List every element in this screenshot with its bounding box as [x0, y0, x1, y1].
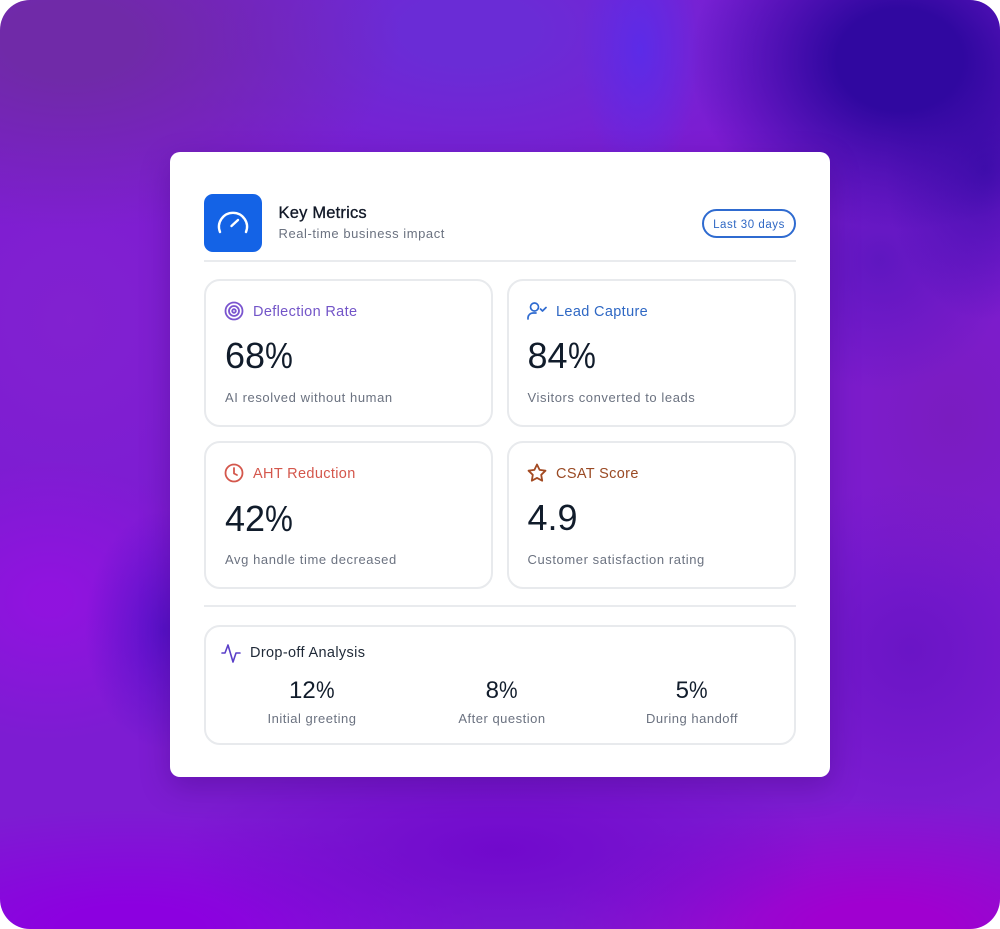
value: 4.9 — [528, 497, 578, 538]
stat: initial greeting: % — [316, 677, 334, 704]
heading: Key Metrics — [278, 204, 367, 222]
value: 84 — [528, 335, 568, 376]
value: 68 — [225, 335, 265, 376]
panel: csat score — [507, 441, 796, 589]
description: Visitors converted to leads — [528, 390, 695, 405]
value — [225, 335, 293, 376]
stat: during handoff: % — [689, 677, 708, 704]
stat: during handoff: 5 — [676, 677, 689, 704]
icon: target — [224, 302, 244, 320]
description: AI resolved without human — [225, 390, 393, 405]
badge: last 30 days: Last 30 days — [713, 219, 785, 231]
description: Avg handle time decreased — [225, 552, 397, 567]
value: % — [568, 335, 595, 376]
panel: aht reduction — [204, 441, 493, 589]
label: CSAT Score — [556, 466, 639, 482]
value — [528, 335, 595, 376]
panel: lead capture — [507, 279, 796, 427]
icon: activity pulse — [221, 644, 241, 663]
panel: deflection rate — [204, 279, 493, 427]
label: Lead Capture — [556, 304, 648, 320]
badge: last 30 days — [702, 209, 796, 238]
value: % — [265, 498, 293, 539]
stat: initial greeting — [268, 677, 356, 726]
stat: after question: % — [499, 677, 518, 704]
icon: clock — [224, 464, 244, 482]
label: Deflection Rate — [253, 304, 357, 320]
main card — [170, 152, 830, 777]
label: AHT Reduction — [253, 466, 356, 482]
value: 42 — [225, 498, 265, 539]
stat: during handoff: During handoff — [646, 711, 738, 726]
stat: initial greeting: 12 — [289, 677, 316, 704]
stat: after question: 8 — [486, 677, 499, 704]
description: Customer satisfaction rating — [528, 552, 705, 567]
subheading: Real-time business impact — [278, 226, 445, 241]
value: % — [265, 335, 293, 376]
stat: during handoff — [646, 677, 738, 726]
panel: drop-off analysis — [204, 625, 796, 745]
stat: after question: After question — [458, 711, 546, 726]
value — [225, 498, 293, 539]
stat: after question — [458, 677, 546, 726]
stat: initial greeting: Initial greeting — [268, 711, 356, 726]
icon: user check — [527, 302, 547, 320]
label: Drop-off Analysis — [250, 645, 365, 661]
icon: star — [528, 464, 546, 482]
icon: gauge tile — [204, 194, 262, 252]
